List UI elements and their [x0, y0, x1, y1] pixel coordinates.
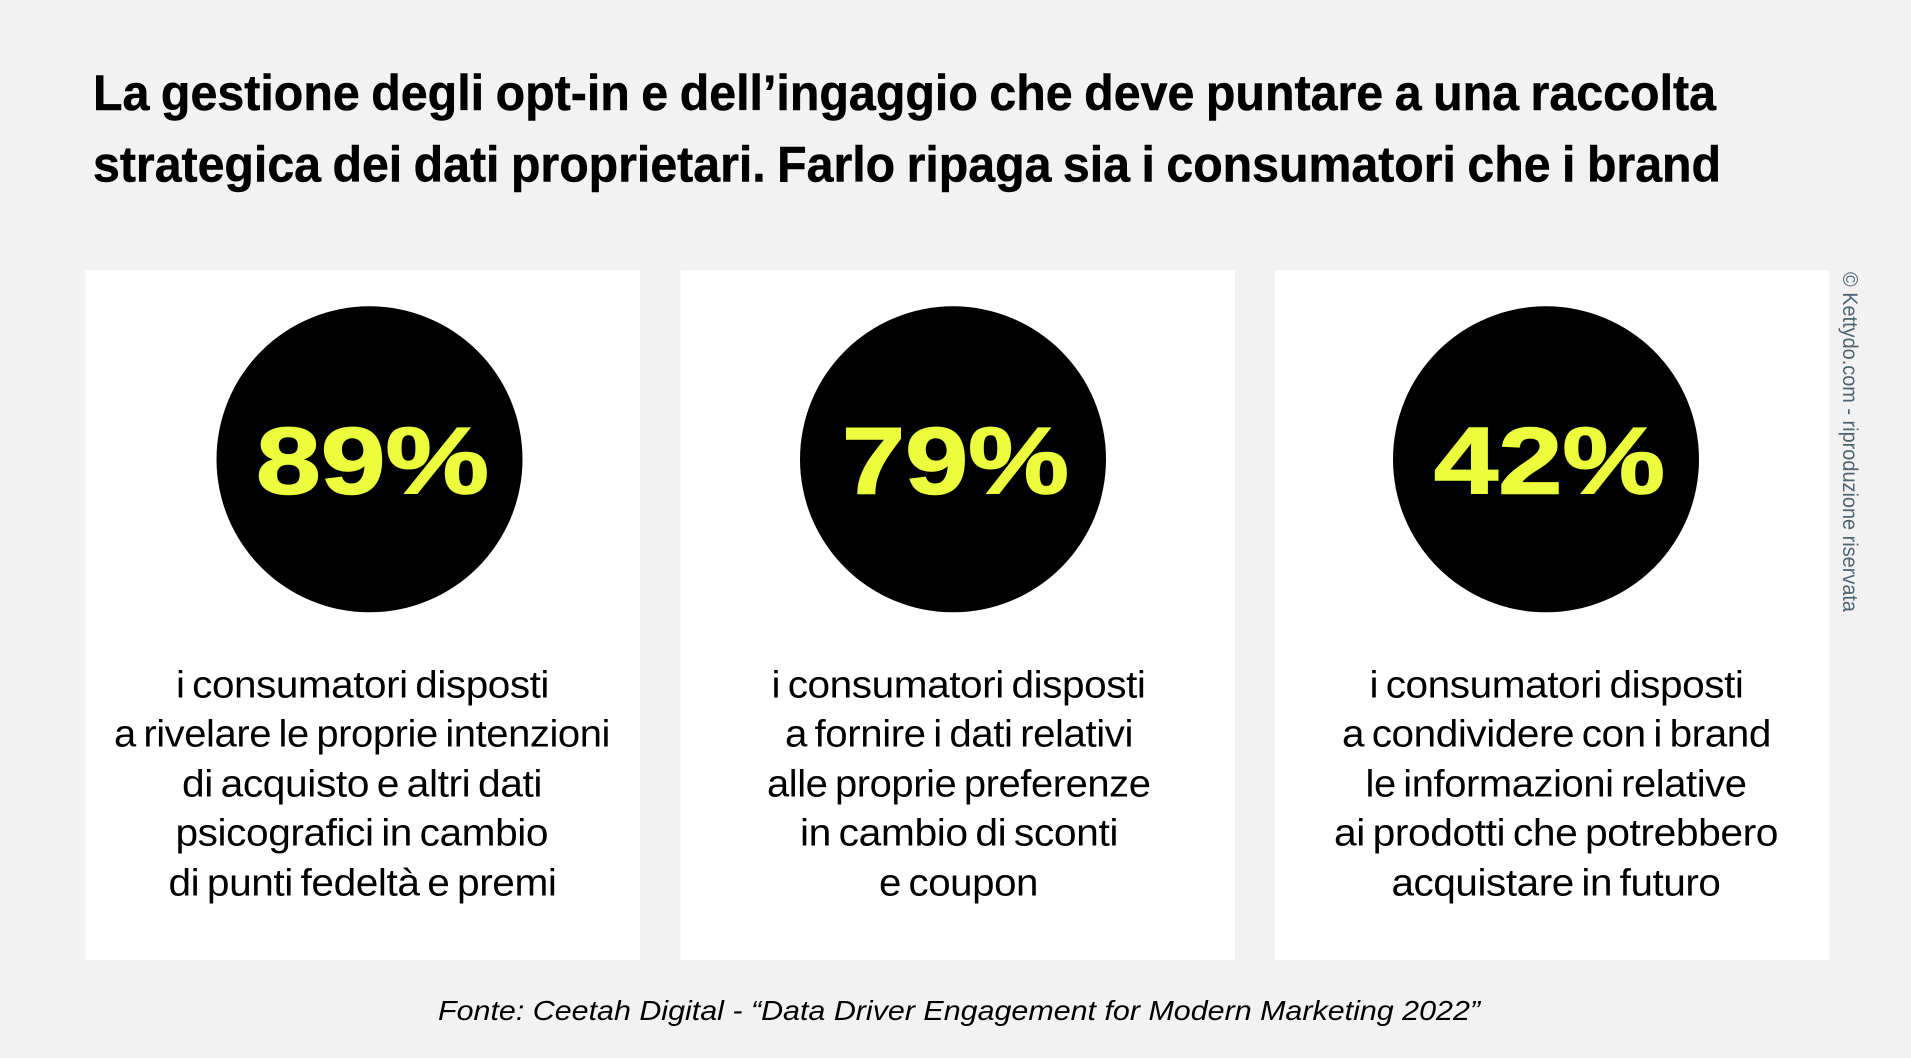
panel text: 89%: i consumatori disposti [176, 665, 549, 707]
panel text: 42%: ai prodotti che potrebbero [1334, 813, 1778, 855]
panel text: 79%: alle proprie preferenze [767, 764, 1150, 806]
panel text: 42%: a condividere con i brand [1342, 714, 1771, 756]
stat circle: 79%: 79% [842, 408, 1069, 514]
stat circle: 42% [1393, 306, 1699, 612]
stat circle: 79% [800, 306, 1106, 612]
panel text: 79%: in cambio di sconti [800, 813, 1118, 855]
panel text: 89% [114, 665, 610, 905]
stat circle: 89% [216, 306, 522, 612]
panel: 42% [1275, 270, 1830, 960]
stat circle: 89%: 89% [256, 408, 489, 514]
panel text: 79%: e coupon [879, 863, 1038, 905]
stat circle: 42%: 42% [1434, 408, 1665, 514]
title: strategica dei dati proprietari. Farlo ripaga sia i consumatori che i brand [93, 136, 1721, 192]
panel text: 89%: di punti fedeltà e premi [168, 863, 556, 905]
panel text: 42%: acquistare in futuro [1392, 863, 1720, 905]
panel text: 42% [1334, 665, 1778, 905]
panel text: 42%: i consumatori disposti [1370, 665, 1744, 707]
title: La gestione degli opt-in e dell’ingaggio che deve puntare a una raccolta [93, 65, 1717, 121]
panel text: 79% [767, 665, 1150, 905]
panel text: 89%: di acquisto e altri dati [182, 764, 542, 806]
panel: 89% [86, 270, 640, 960]
panel text: 89%: a rivelare le proprie intenzioni [114, 714, 610, 756]
copyright watermark: © Kettydo.com - riproduzione riservata [1838, 272, 1861, 612]
source note: Fonte: Ceetah Digital - “Data Driver Engagement for Modern Marketing 2022” [438, 995, 1482, 1026]
panel text: 79%: i consumatori disposti [772, 665, 1146, 707]
panel: 79% [680, 270, 1235, 960]
panel text: 79%: a fornire i dati relativi [785, 714, 1133, 756]
panel text: 89%: psicografici in cambio [176, 813, 548, 855]
title [93, 65, 1721, 192]
panel text: 42%: le informazioni relative [1366, 764, 1746, 806]
